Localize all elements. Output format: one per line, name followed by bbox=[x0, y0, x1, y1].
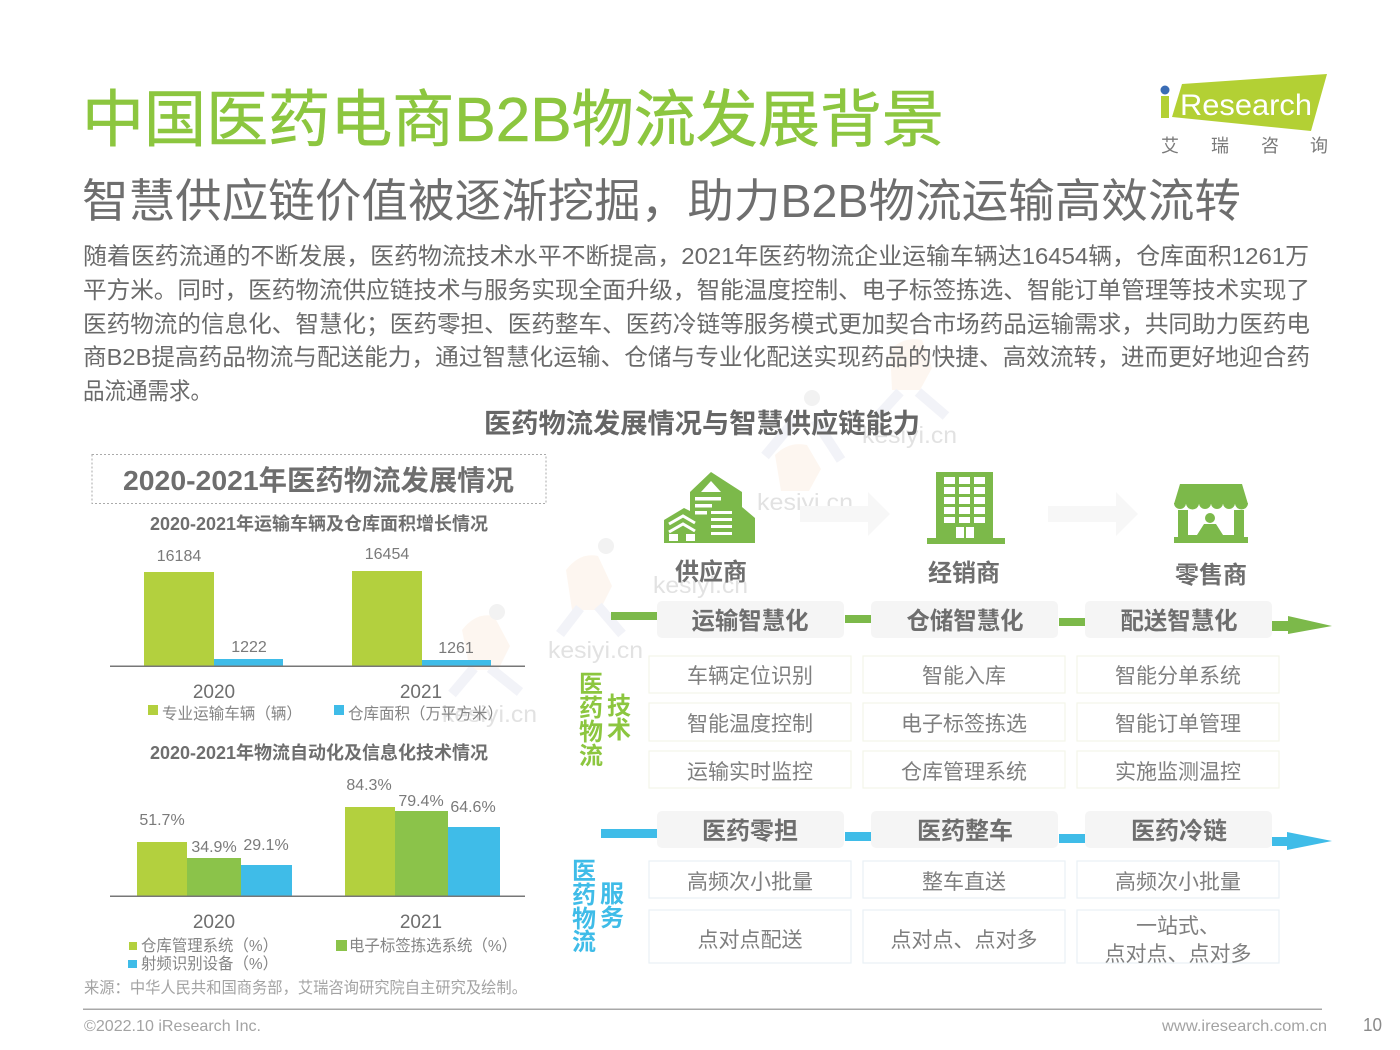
logo: iResearch: 询 bbox=[1310, 136, 1328, 156]
chart: automation and information technology: 2020 bbox=[193, 912, 235, 933]
label: service side heading: 流 bbox=[572, 929, 596, 956]
chart: vehicles and warehouse area: 16454 bbox=[365, 546, 409, 563]
heading: service modes: 医药零担 bbox=[702, 818, 798, 845]
footer bbox=[83, 1008, 1382, 1035]
logo: iResearch: 瑞 bbox=[1211, 136, 1229, 156]
watermark: kesiyi text: kesiyi.cn bbox=[442, 701, 537, 727]
chart: vehicles and warehouse area: 2020-2021年运输车辆及仓库面积增长情况 bbox=[150, 513, 488, 534]
label: service side heading: 物 bbox=[572, 906, 596, 933]
label: technology side heading: 物 bbox=[579, 719, 603, 746]
title: 中国医药电商B2B物流发展背景 bbox=[82, 86, 944, 155]
chart: vehicles and warehouse area: 2021 bbox=[400, 682, 442, 703]
footer: www.iresearch.com.cn bbox=[1161, 1018, 1327, 1035]
label: service side heading: 务 bbox=[600, 905, 624, 932]
chart: vehicles and warehouse area: 仓库面积（万平方米） bbox=[348, 705, 503, 723]
logo: iResearch: 咨 bbox=[1261, 136, 1279, 156]
body paragraph: 随着医药流通的不断发展，医药物流技术水平不断提高，2021年医药物流企业运输车辆达16454辆，仓库面积1261万 bbox=[83, 243, 1309, 269]
icon: supplier buildings bbox=[664, 472, 755, 543]
body paragraph: 平方米。同时，医药物流供应链技术与服务实现全面升级，智能温度控制、电子标签拣选、智能订单管理等技术实现了 bbox=[83, 277, 1310, 303]
logo: iResearch: 艾 bbox=[1161, 136, 1179, 156]
table: technology cells: 车辆定位识别 bbox=[687, 665, 813, 688]
label: service side heading: 药 bbox=[572, 882, 596, 909]
chart: automation and information technology: 64.6% bbox=[450, 799, 496, 816]
label: technology side heading: 药 bbox=[579, 695, 603, 722]
chart: automation and information technology: 51.7% bbox=[139, 812, 185, 829]
logo: iResearch: Research bbox=[1180, 89, 1312, 122]
table: technology cells: 运输实时监控 bbox=[687, 761, 813, 784]
label: retailer: 零售商 bbox=[1175, 562, 1247, 589]
icon: retail store bbox=[1174, 484, 1248, 543]
table: service cells: 点对点、点对多 bbox=[890, 929, 1038, 952]
chart: automation and information technology: 仓库管理系统（%） bbox=[141, 937, 278, 955]
watermark: kesiyi text bbox=[442, 422, 957, 727]
footer: ©2022.10 iResearch Inc. bbox=[84, 1018, 261, 1035]
body paragraph: 品流通需求。 bbox=[83, 378, 212, 404]
chart: automation and information technology: 2020-2021年物流自动化及信息化技术情况 bbox=[150, 742, 488, 763]
arrow: technology flow bbox=[611, 612, 1332, 634]
table: technology cells: 智能分单系统 bbox=[1115, 665, 1241, 688]
chart: vehicles and warehouse area bbox=[110, 513, 525, 723]
table: service cells: 点对点、点对多 bbox=[1104, 943, 1252, 966]
icon: distributor tower bbox=[927, 472, 1005, 544]
heading: technology stages: 运输智慧化 bbox=[692, 608, 808, 635]
heading: technology stages: 仓储智慧化 bbox=[906, 608, 1024, 635]
arrow: service flow bbox=[601, 829, 1332, 850]
table: technology cells: 智能入库 bbox=[922, 665, 1006, 688]
panel: left heading box: 2020-2021年医药物流发展情况 bbox=[123, 465, 514, 496]
panel: left heading box bbox=[92, 454, 546, 504]
heading: service modes bbox=[657, 811, 1272, 848]
chart: vehicles and warehouse area: 16184 bbox=[157, 548, 201, 565]
label: distributor: 经销商 bbox=[928, 560, 1000, 587]
label: technology side heading: 术 bbox=[607, 717, 631, 744]
watermark: kesiyi text: kesiyi.cn bbox=[548, 637, 643, 663]
table: service cells: 一站式、 bbox=[1136, 915, 1220, 938]
arrow: distributor to retailer bbox=[1048, 492, 1138, 536]
footer: 10 bbox=[1363, 1015, 1382, 1035]
table: technology cells: 仓库管理系统 bbox=[901, 761, 1027, 784]
chart: vehicles and warehouse area: 2020 bbox=[193, 682, 235, 703]
panel: technology logistics bbox=[579, 601, 1279, 788]
heading: technology stages bbox=[657, 601, 1272, 638]
table: technology cells: 实施监测温控 bbox=[1115, 761, 1241, 784]
chart: automation and information technology: 84.3% bbox=[346, 777, 392, 794]
table: service cells: 高频次小批量 bbox=[1115, 871, 1241, 894]
section heading: 医药物流发展情况与智慧供应链能力 bbox=[484, 409, 920, 439]
label: technology side heading: 流 bbox=[579, 743, 603, 770]
watermark: kesiyi figures bbox=[452, 339, 946, 694]
label: service side heading bbox=[572, 858, 624, 956]
chart: automation and information technology: 射频识别设备（%） bbox=[141, 955, 278, 973]
table: technology cells bbox=[649, 656, 1279, 788]
chart: automation and information technology bbox=[110, 742, 525, 973]
chart: vehicles and warehouse area: 1261 bbox=[438, 640, 474, 657]
table: technology cells: 智能订单管理 bbox=[1115, 713, 1241, 736]
table: technology cells: 电子标签拣选 bbox=[901, 713, 1027, 736]
watermark: kesiyi text: kesiyi.cn bbox=[862, 422, 957, 448]
table: service cells: 整车直送 bbox=[922, 871, 1006, 894]
chart: automation and information technology: 29.1% bbox=[243, 837, 289, 854]
chart: automation and information technology: 2021 bbox=[400, 912, 442, 933]
label: technology side heading: 技 bbox=[607, 693, 631, 720]
table: technology cells: 智能温度控制 bbox=[687, 713, 813, 736]
watermark: kesiyi text: kesiyi.cn bbox=[757, 489, 853, 515]
watermark: kesiyi text: kesiyi.cn bbox=[653, 572, 748, 598]
chart: automation and information technology: 79.4% bbox=[398, 793, 444, 810]
heading: service modes: 医药整车 bbox=[917, 818, 1013, 845]
label: service side heading: 医 bbox=[572, 858, 596, 885]
chart: automation and information technology: 34.9% bbox=[191, 839, 237, 856]
label: service side heading: 服 bbox=[600, 881, 624, 908]
label: technology side heading bbox=[579, 671, 631, 770]
table: service cells: 高频次小批量 bbox=[687, 871, 813, 894]
chart: vehicles and warehouse area: 专业运输车辆（辆） bbox=[162, 705, 302, 723]
arrow: supplier to distributor bbox=[800, 492, 890, 536]
chart: vehicles and warehouse area: 1222 bbox=[231, 639, 267, 656]
table: service cells bbox=[649, 861, 1279, 966]
heading: technology stages: 配送智慧化 bbox=[1120, 608, 1238, 635]
body paragraph: 商B2B提高药品物流与配送能力，通过智慧化运输、仓储与专业化配送实现药品的快捷、高效流转，进而更好地迎合药 bbox=[83, 344, 1310, 370]
heading: service modes: 医药冷链 bbox=[1131, 818, 1227, 845]
subtitle: 智慧供应链价值被逐渐挖掘，助力B2B物流运输高效流转 bbox=[82, 175, 1241, 227]
label: supplier: 供应商 bbox=[675, 559, 747, 586]
panel: service logistics bbox=[572, 811, 1279, 966]
source note: 来源：中华人民共和国商务部，艾瑞咨询研究院自主研究及绘制。 bbox=[84, 979, 527, 997]
logo: iResearch bbox=[1160, 74, 1328, 156]
chart: automation and information technology: 电子标签拣选系统（%） bbox=[349, 937, 517, 955]
body paragraph bbox=[83, 243, 1310, 404]
table: service cells: 点对点配送 bbox=[698, 929, 802, 952]
body paragraph: 医药物流的信息化、智慧化；医药零担、医药整车、医药冷链等服务模式更加契合市场药品运输需求，共同助力医药电 bbox=[83, 311, 1310, 337]
label: technology side heading: 医 bbox=[579, 671, 603, 698]
